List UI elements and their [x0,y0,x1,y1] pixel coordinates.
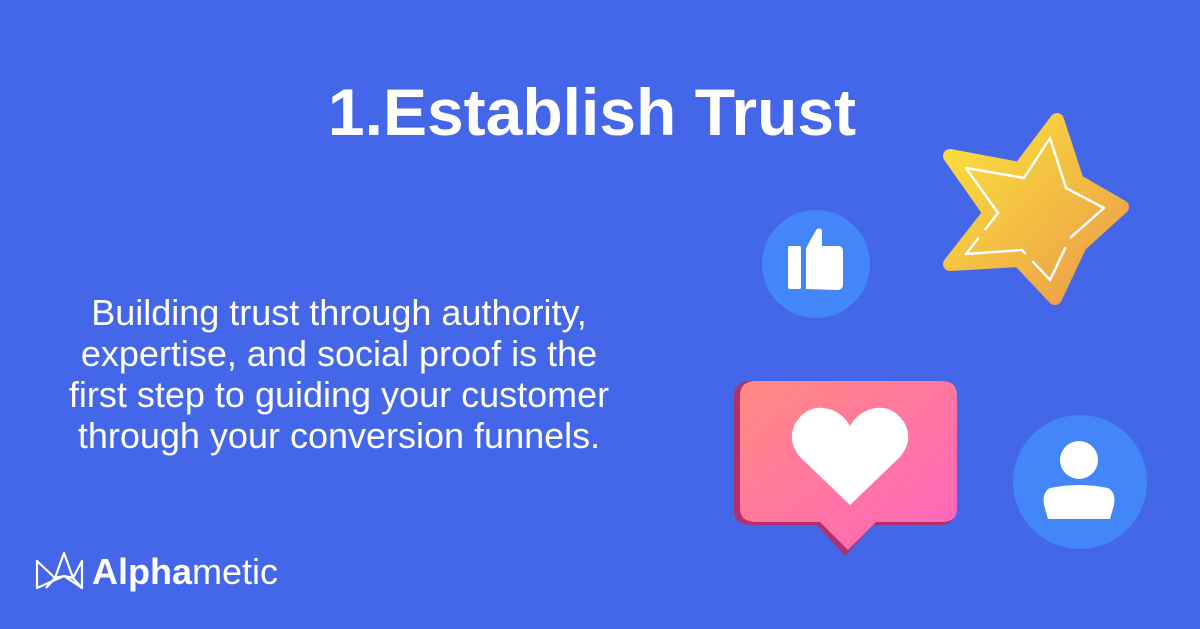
body text: expertise, and social proof is the [81,333,597,374]
logo icon [37,553,82,588]
logo text: Alphametic [92,551,278,592]
icon: person [1013,415,1147,549]
body text [69,292,609,456]
body text: through your conversion funnels. [78,415,600,456]
body text: first step to guiding your customer [69,374,609,415]
icon: star [950,120,1122,298]
title: 1.Establish Trust [328,75,856,149]
body text: Building trust through authority, [91,292,587,333]
icon: thumbs up [762,210,870,318]
icon: heart bubble [734,381,957,556]
